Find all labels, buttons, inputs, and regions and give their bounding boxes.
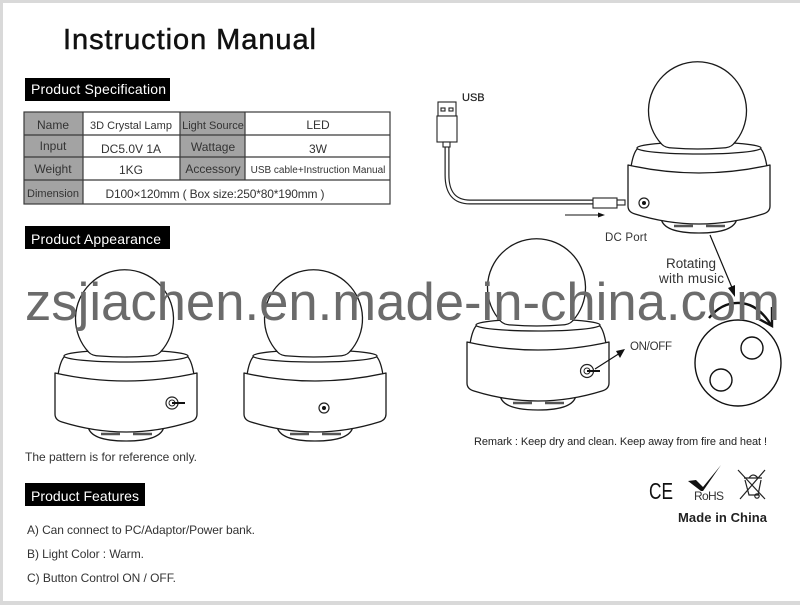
specification table: DC5.0V 1A	[101, 142, 161, 156]
label: on off: ON/OFF	[630, 341, 672, 353]
specification table: USB cable+Instruction Manual	[251, 165, 385, 176]
usb cable	[437, 102, 625, 208]
rotation arrow	[709, 303, 772, 326]
heading: product features	[25, 483, 145, 506]
specification table: Input	[40, 139, 67, 153]
specification table: Accessory	[185, 162, 241, 176]
arrow: plug direction	[565, 212, 605, 218]
specification table: D100×120mm ( Box size:250*80*190mm )	[106, 187, 324, 201]
specification table: 3D Crystal Lamp	[90, 120, 172, 132]
heading: product specification: Product Specification	[31, 81, 166, 97]
arrow: on off	[595, 349, 625, 369]
remark: Remark : Keep dry and clean. Keep away from fire and heat !	[474, 436, 767, 448]
made in china: Made in China	[678, 510, 768, 525]
arrow: to base	[710, 235, 735, 297]
icon: rohs	[688, 465, 724, 503]
label: rotating with music: with music	[658, 271, 724, 286]
specification table	[24, 112, 390, 204]
specification table: Weight	[34, 162, 72, 176]
specification table: Light Source	[182, 120, 244, 132]
feature list	[27, 523, 255, 585]
label: rotating with music	[658, 256, 724, 286]
heading: product features: Product Features	[31, 488, 139, 504]
specification table: Name	[37, 118, 69, 132]
watermark: zsjiachen.en.made-in-china.com	[25, 273, 780, 332]
label: dc port: DC Port	[605, 232, 648, 244]
feature list: B) Light Color : Warm.	[27, 547, 144, 561]
specification table: Wattage	[191, 140, 235, 154]
lamp: front view with port	[244, 270, 386, 441]
label: usb: USB	[462, 92, 485, 104]
heading: product appearance	[25, 226, 170, 249]
icon: weee bin	[738, 470, 765, 499]
lamp: front view with switch	[55, 270, 197, 441]
base underside diagram	[695, 320, 781, 406]
specification table: Dimension	[27, 188, 79, 200]
specification table: 3W	[309, 142, 328, 156]
feature list: A) Can connect to PC/Adaptor/Power bank.	[27, 523, 255, 537]
icon: rohs: RoHS	[694, 489, 724, 503]
heading: product specification	[25, 78, 170, 101]
lamp: dc port view	[628, 62, 770, 233]
icon: ce mark: CE	[649, 478, 673, 504]
feature list: C) Button Control ON / OFF.	[27, 571, 176, 585]
pattern note: The pattern is for reference only.	[25, 450, 197, 464]
specification table: LED	[306, 118, 330, 132]
title: Instruction Manual	[63, 24, 316, 56]
specification table: 1KG	[119, 163, 143, 177]
lamp: on off view	[467, 239, 609, 410]
heading: product appearance: Product Appearance	[31, 231, 161, 247]
label: rotating with music: Rotating	[666, 256, 716, 271]
